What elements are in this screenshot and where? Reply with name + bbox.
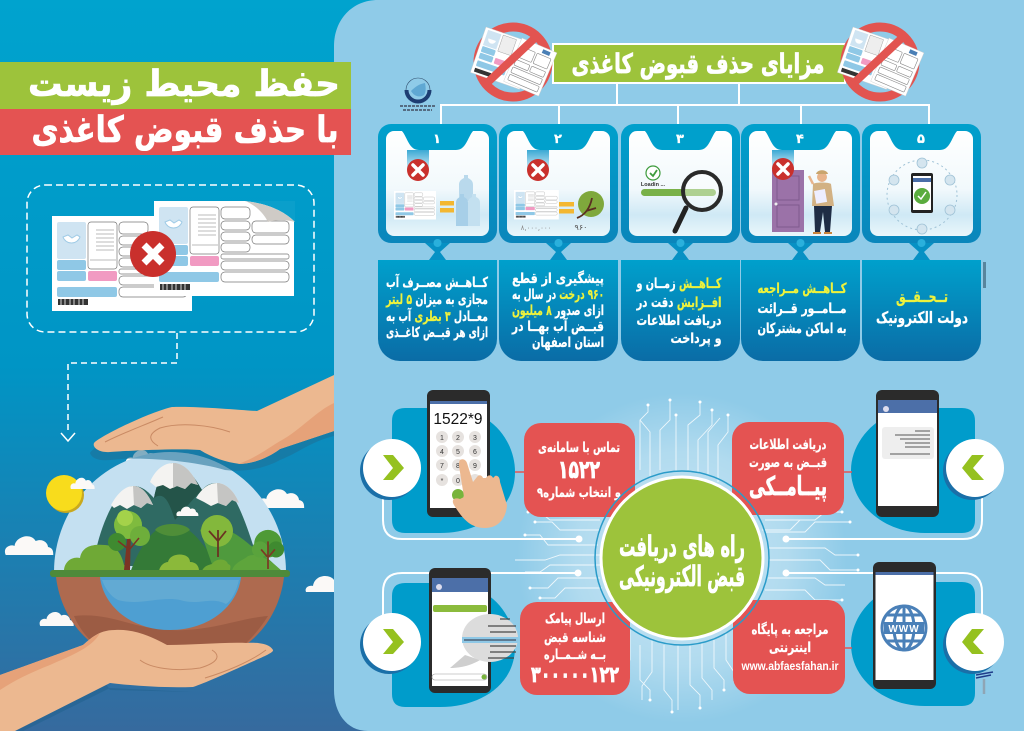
icon: phone dial pad: 3 (473, 435, 477, 442)
icon: phone dial pad (427, 390, 490, 517)
text block: ۹۶۰ درخت در سال به (512, 287, 604, 303)
callout: مراجعه به پایگاه (752, 621, 828, 638)
icon: meter reader (809, 170, 834, 234)
text block (378, 260, 497, 361)
center circle: قبض الکترونیکی (619, 560, 745, 593)
text block: قبــض آب بهــا در (511, 317, 604, 335)
white connector lines (383, 495, 982, 615)
right panel background (334, 0, 1024, 731)
icon: sun (46, 475, 84, 513)
panel: benefit 3 (621, 124, 740, 361)
panel: benefit 4 (741, 124, 860, 361)
icon: phone dial pad: 1 (440, 435, 444, 442)
hills and bushes (64, 524, 284, 573)
credit mark (983, 262, 986, 288)
heading banner: مزایای حذف قبوض کاغذی (572, 49, 824, 80)
callout: شناسه قبض (544, 630, 606, 646)
icon: phone with globe (873, 562, 936, 689)
panel: benefit 5 (862, 124, 981, 361)
blob (392, 408, 515, 533)
callout: اینترنتی (769, 640, 811, 656)
heading banner (553, 44, 845, 83)
icon: phone dial pad: 1522*9 (433, 411, 483, 428)
callout (733, 600, 852, 694)
text block (499, 260, 618, 361)
icon: connected phone (887, 158, 957, 234)
dashed arrow (61, 333, 177, 441)
icon: phone inbox (876, 390, 939, 517)
icon: phone dial pad: 8 (456, 463, 460, 470)
callout: دریافت اطلاعات (750, 437, 827, 453)
icon: red cross (130, 231, 176, 277)
icon: phone messages (429, 568, 491, 693)
center circle (595, 471, 769, 645)
method: dial 1522 (392, 390, 635, 533)
logo (400, 78, 435, 110)
callout: ارسال پیامک (545, 611, 605, 627)
text block (621, 260, 740, 361)
center circle: راه های دریافت (619, 530, 745, 563)
clouds (5, 450, 334, 626)
text block: معــادل ۳ بطری آب به (386, 307, 488, 325)
icon: phone dial pad: 6 (473, 449, 477, 456)
text block (741, 260, 860, 361)
water (100, 577, 241, 630)
icon: phone dial pad: 5 (456, 449, 460, 456)
text block: ازای هر قبــض کاغــذی (386, 325, 488, 341)
callout: ۱۵۲۲ (558, 455, 600, 484)
text block: استان اصفهان (532, 335, 604, 351)
icon: no-paper sign left (470, 27, 557, 97)
text block: کــاهــش زمــان و (636, 276, 722, 292)
dashed frame with paper bills (27, 185, 314, 332)
illustration: earth globe (46, 452, 290, 650)
method: SMS bill ID (392, 568, 630, 707)
text block: افــزایش دقت در (636, 295, 722, 311)
callout: بــه شــمــاره (544, 647, 606, 663)
callout: پیــامــکی (749, 472, 827, 502)
panel: benefit 4: ۴ (796, 132, 804, 147)
text block: مــامــور قــرائت (758, 301, 846, 317)
panel: benefit 1 (378, 124, 497, 361)
text block: ازای صدور ۸ میلیون (512, 303, 604, 319)
arrow: receive (943, 439, 1004, 500)
callout: ۳۰۰۰۰۰۱۲۲ (531, 663, 619, 688)
blob (851, 582, 975, 706)
panel: benefit 3: ۳ (676, 132, 684, 147)
soil (56, 577, 284, 650)
callout (732, 422, 852, 515)
text block: دولت الکترونیک (876, 308, 968, 327)
icon: no-paper sign right (837, 27, 924, 97)
text block: تــحــقــق (896, 287, 948, 306)
title: green band: حفظ محیط زیست (28, 64, 340, 105)
ground band (50, 570, 290, 577)
icon: hand (453, 459, 507, 528)
icon: phone dial pad: * (441, 478, 444, 485)
callout: و انتخاب شماره۹ (537, 485, 621, 501)
icon: check and loading bar (641, 166, 716, 196)
callout: تماس با سامانه‌ی (538, 440, 620, 456)
illustration: bottom hand (0, 630, 273, 731)
icon: check and loading bar: Loadin ... (641, 182, 666, 188)
icon: cross tag (407, 150, 429, 181)
callout (520, 602, 630, 695)
callout: قبــض به صورت (749, 455, 827, 471)
arrow: sms id (360, 613, 421, 674)
arrow: dial (360, 439, 421, 500)
text block: به اماکن مشترکان (758, 321, 846, 337)
icon: phone dial pad: 2 (456, 435, 460, 442)
icon: front paper bill (154, 201, 295, 296)
text block: مجازی به میزان ۵ لیتر (385, 292, 488, 308)
icon: phone dial pad: 7 (440, 463, 444, 470)
text block: دریافت اطلاعات (636, 313, 722, 329)
icon: back paper bill (52, 216, 192, 311)
text block: پیشگیری از قطع (512, 270, 604, 287)
icon: bill equals tree: ۸,۰۰۰,۰۰۰ (521, 224, 551, 232)
arrow buttons (360, 439, 1004, 674)
trees (108, 510, 284, 570)
icon: magnifier (675, 172, 721, 231)
callout: www.abfaesfahan.ir (741, 659, 839, 673)
text block: کــاهــش مــراجعه (758, 281, 847, 297)
icon: message bubble (450, 614, 518, 668)
icon: cross tag (527, 150, 549, 181)
circuit pattern (515, 393, 860, 723)
mountains (96, 463, 254, 566)
icon: phone dial pad: 4 (440, 449, 444, 456)
text block: کــاهــش مصــرف آب (386, 273, 489, 291)
text block: و پرداخت (670, 331, 722, 347)
text block (862, 260, 981, 361)
number: ۱ (433, 132, 441, 147)
icon: bill equals tree: ۹۶۰ (575, 223, 587, 232)
icon: cross tag (772, 150, 794, 180)
callout (515, 423, 635, 517)
method: receive by SMS (732, 390, 975, 533)
icon: phone dial pad: 0 (456, 478, 460, 485)
icon: bill equals bottles (394, 175, 480, 226)
arrow: website (943, 613, 1004, 674)
designer mark (976, 672, 993, 694)
title: red band: با حذف قبوض کاغذی (32, 110, 338, 151)
icon: phone with globe: WWW (888, 624, 920, 635)
icon: phone dial pad: 9 (473, 463, 477, 470)
method: website (733, 562, 975, 706)
panel: benefit 2: ۲ (554, 132, 562, 147)
connector dots (574, 536, 790, 576)
illustration: top hand (90, 375, 334, 471)
blob (851, 408, 975, 533)
icon: door (772, 170, 804, 232)
blob (392, 583, 515, 707)
icon: bill equals tree (514, 190, 604, 232)
connector lines (441, 83, 929, 124)
panel: benefit 5: ۵ (917, 132, 925, 147)
panel: benefit 2 (499, 124, 618, 361)
